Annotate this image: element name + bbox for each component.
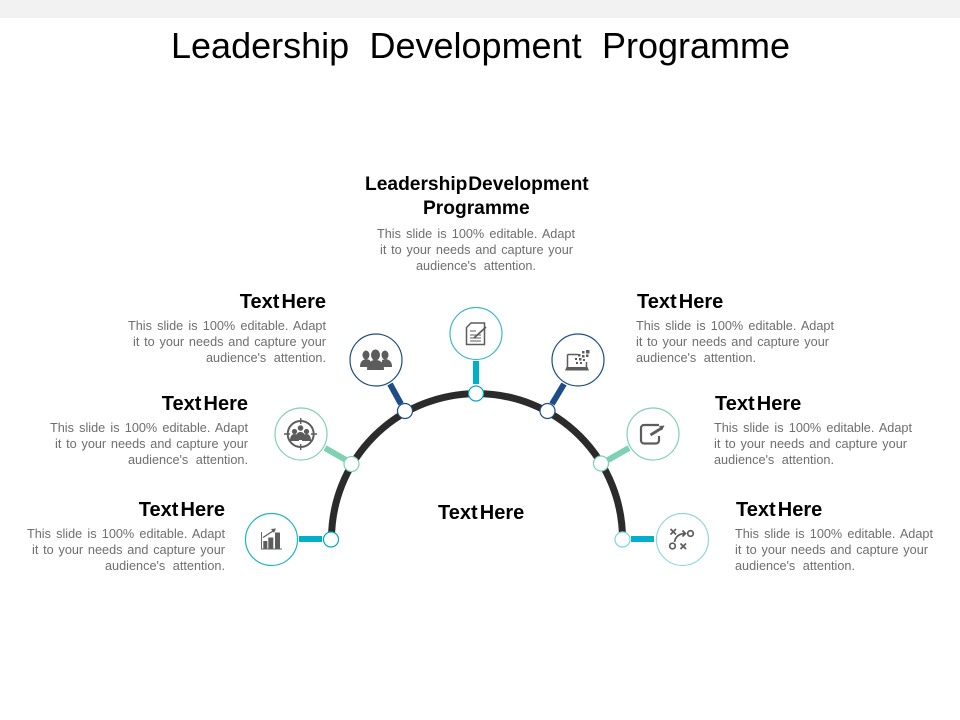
- connector: team: [390, 384, 412, 418]
- connector: target team: [325, 448, 359, 472]
- connector: document: [468, 361, 484, 401]
- heading: top: [365, 174, 589, 273]
- icon: strategy play: [656, 514, 708, 566]
- connector: laptop: [540, 384, 564, 418]
- icon: target team: [275, 408, 327, 460]
- text: upper right: This slide is 100% editable. Adapt: [636, 319, 834, 333]
- text: upper left: audience's attention.: [206, 351, 326, 365]
- text block: top: audience's attention.: [416, 259, 536, 273]
- text: upper right: Text Here: [637, 291, 723, 313]
- text: lower left: [27, 499, 225, 573]
- text: upper left: This slide is 100% editable. Adapt: [128, 319, 326, 333]
- icon: laptop with pixels: [552, 334, 604, 386]
- text: middle right: This slide is 100% editable. Adapt: [714, 421, 912, 435]
- text: middle right: Text Here: [715, 393, 801, 415]
- text: lower right: [735, 499, 933, 573]
- text: upper right: [636, 291, 834, 365]
- text: upper right: it to your needs and capture your: [636, 335, 829, 349]
- text: upper right: audience's attention.: [636, 351, 756, 365]
- text: lower right: This slide is 100% editable. Adapt: [735, 527, 933, 541]
- text: upper left: [128, 291, 326, 365]
- text block: top: This slide is 100% editable. Adapt: [377, 227, 575, 241]
- text: middle left: audience's attention.: [128, 453, 248, 467]
- text: lower left: it to your needs and capture your: [32, 543, 225, 557]
- icon: bar chart: [246, 514, 298, 566]
- connector: strategy: [615, 532, 654, 547]
- icon: team: [350, 334, 402, 386]
- text: lower right: audience's attention.: [735, 559, 855, 573]
- text: upper left: Text Here: [240, 291, 326, 313]
- text: middle left: This slide is 100% editable. Adapt: [50, 421, 248, 435]
- text: middle right: audience's attention.: [714, 453, 834, 467]
- connector: chart: [299, 532, 338, 547]
- text block: top: [377, 227, 575, 273]
- title: Leadership Development Programme: [171, 25, 790, 66]
- text: lower right: Text Here: [736, 499, 822, 521]
- text: middle right: it to your needs and capture your: [714, 437, 907, 451]
- heading: top: Programme: [423, 198, 530, 219]
- text: lower left: Text Here: [139, 499, 225, 521]
- heading: top: Leadership Development: [365, 174, 589, 195]
- connector: edit: [594, 448, 629, 471]
- icon: edit: [627, 408, 679, 460]
- text: lower left: This slide is 100% editable. Adapt: [27, 527, 225, 541]
- text: middle left: [50, 393, 248, 467]
- text: lower left: audience's attention.: [105, 559, 225, 573]
- text: upper left: it to your needs and capture your: [133, 335, 326, 349]
- text: middle right: [714, 393, 912, 467]
- heading: center: Text Here: [438, 502, 524, 524]
- text: middle left: Text Here: [162, 393, 248, 415]
- text: lower right: it to your needs and capture your: [735, 543, 928, 557]
- arc: [332, 394, 622, 539]
- text block: top: it to your needs and capture your: [380, 243, 573, 257]
- text: middle left: it to your needs and capture your: [55, 437, 248, 451]
- icon: document: [450, 308, 502, 360]
